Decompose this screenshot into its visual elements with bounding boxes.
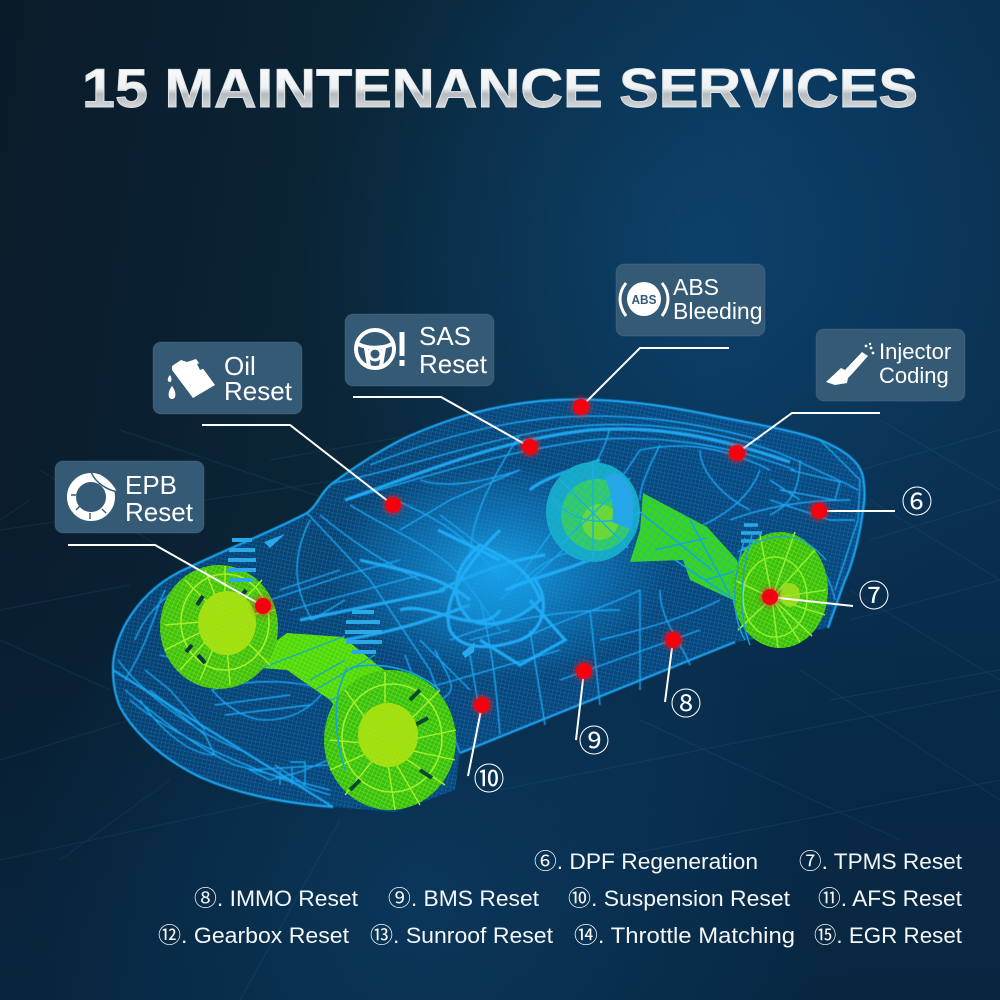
leader lines bbox=[68, 348, 895, 776]
silhouette outline bbox=[113, 399, 865, 807]
service legend: ⑧. IMMO Reset bbox=[194, 886, 358, 911]
text: Reset bbox=[125, 497, 194, 527]
text: Reset bbox=[224, 376, 293, 406]
icon: ABS: ABS bbox=[632, 292, 657, 307]
service legend: ⑮. EGR Reset bbox=[814, 923, 962, 948]
marker numbers: ⑦ bbox=[858, 579, 890, 614]
rear axle bbox=[630, 493, 745, 600]
front right spring bbox=[345, 612, 382, 652]
service legend: ⑬. Sunroof Reset bbox=[370, 923, 553, 948]
rear far wheel bbox=[546, 462, 640, 562]
callout: SAS Reset bbox=[345, 314, 494, 386]
text: Oil bbox=[224, 351, 256, 381]
icon: injector bbox=[826, 343, 874, 385]
text: Injector bbox=[879, 339, 951, 364]
service legend: ⑪. AFS Reset bbox=[818, 886, 962, 911]
callout: Injector Coding bbox=[816, 329, 965, 401]
icon: ABS bbox=[620, 282, 668, 316]
text: Reset bbox=[419, 349, 488, 379]
hood vent marks bbox=[264, 534, 475, 658]
front left spring bbox=[228, 540, 256, 580]
icon: oil can bbox=[168, 359, 215, 399]
service legend bbox=[158, 849, 962, 948]
service legend: ⑨. BMS Reset bbox=[388, 886, 539, 911]
front axle bbox=[260, 633, 400, 720]
wire lines far bbox=[118, 416, 860, 795]
marker numbers: ⑩ bbox=[474, 762, 504, 797]
marker numbers bbox=[474, 485, 932, 797]
service legend: ⑥. DPF Regeneration bbox=[534, 849, 758, 874]
marker numbers: ⑧ bbox=[670, 687, 702, 722]
service legend: ⑩. Suspension Reset bbox=[568, 886, 790, 911]
icon: steering wheel warning bbox=[356, 330, 402, 368]
callout: Oil Reset bbox=[153, 342, 302, 414]
text: ABS bbox=[673, 274, 719, 300]
icon: brake disc bbox=[71, 472, 118, 519]
marker numbers: ⑥ bbox=[902, 485, 932, 520]
marker numbers: ⑨ bbox=[578, 724, 610, 759]
title: 15 MAINTENANCE SERVICES bbox=[82, 57, 918, 119]
bright tubes bbox=[300, 429, 790, 665]
front right wheel bbox=[324, 665, 456, 810]
rear spring bbox=[741, 525, 762, 573]
text: Coding bbox=[879, 363, 949, 388]
service legend: ⑦. TPMS Reset bbox=[799, 849, 962, 874]
rear near wheel bbox=[732, 532, 828, 648]
text: EPB bbox=[125, 470, 177, 500]
car wireframe bbox=[113, 399, 865, 812]
car body bbox=[113, 399, 865, 812]
callout: EPB Reset bbox=[55, 461, 204, 533]
text: Bleeding bbox=[673, 298, 763, 324]
front left wheel bbox=[160, 565, 278, 689]
text: SAS bbox=[419, 321, 471, 351]
interior glow bbox=[330, 460, 670, 680]
callout: ABS Bleeding bbox=[616, 264, 765, 336]
service legend: ⑫. Gearbox Reset bbox=[158, 923, 349, 948]
service legend: ⑭. Throttle Matching bbox=[574, 923, 795, 948]
red markers bbox=[253, 397, 829, 715]
